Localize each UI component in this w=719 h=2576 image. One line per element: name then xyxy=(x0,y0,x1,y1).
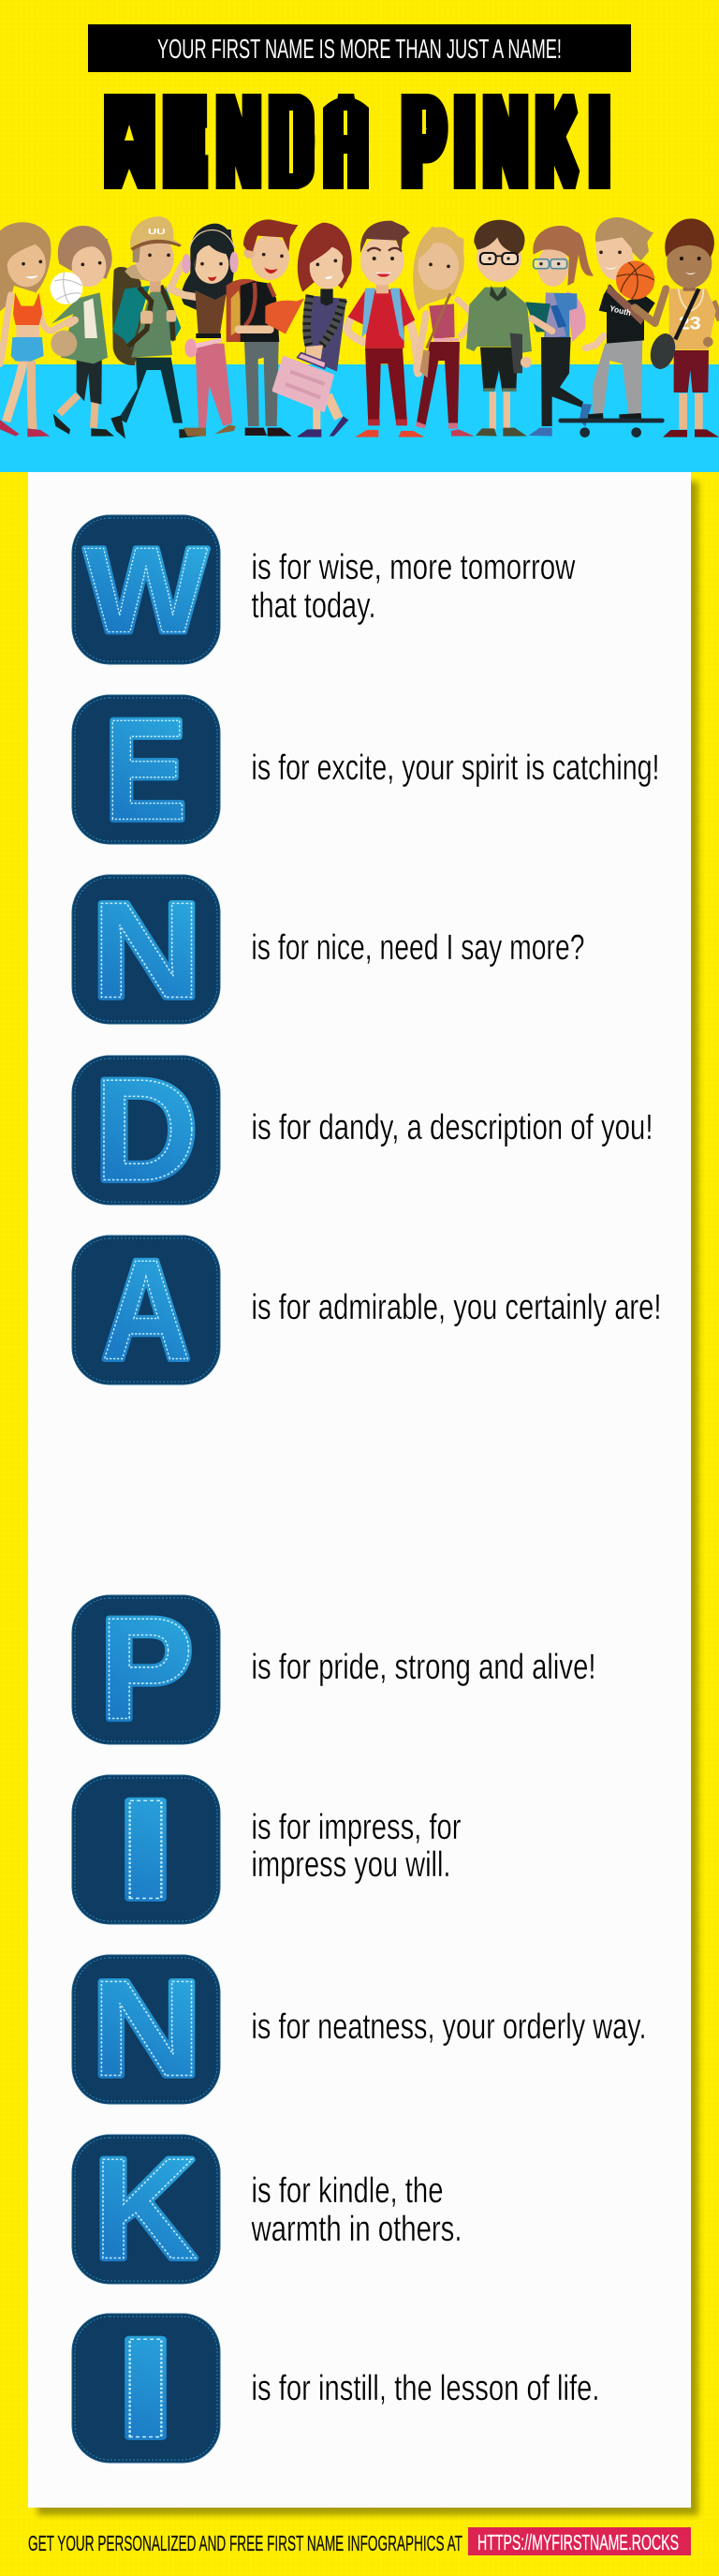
letter I second: I xyxy=(115,2309,176,2467)
letter K: K xyxy=(94,2129,197,2289)
title: name: K xyxy=(537,82,576,200)
person 9 with glasses xyxy=(466,220,532,437)
row: E xyxy=(72,690,659,851)
text W xyxy=(251,548,576,626)
letter I: I xyxy=(115,1770,176,1929)
text N: is for nice, need I say more? xyxy=(251,928,584,968)
letter P: P xyxy=(99,1588,194,1750)
letter W: W xyxy=(84,522,208,658)
title: name xyxy=(104,81,608,201)
text I xyxy=(251,1808,462,1885)
text K xyxy=(251,2171,462,2249)
person 8 blonde with shoulder bag xyxy=(413,227,475,437)
group: left four people xyxy=(0,216,239,438)
row: I xyxy=(72,1770,462,1929)
text I second: is for instill, the lesson of life. xyxy=(251,2369,599,2408)
group: right four people xyxy=(466,217,719,437)
letter K: K xyxy=(94,2129,197,2289)
letter E: E xyxy=(104,690,187,851)
row: I second xyxy=(72,2309,599,2467)
panel shadow xyxy=(37,481,698,2515)
text K: warmth in others. xyxy=(251,2210,462,2249)
title: name: P xyxy=(404,83,444,201)
person 1 xyxy=(0,222,73,437)
panel: name letters xyxy=(28,472,691,2508)
person 3 with backpack xyxy=(110,216,199,438)
letter E: E xyxy=(104,690,187,851)
volleyball xyxy=(51,272,82,304)
text W: that today. xyxy=(251,586,376,626)
letter N second: N xyxy=(91,1952,202,2105)
person 11 on skateboard with basketball: Youth xyxy=(609,303,632,318)
letter A: A xyxy=(101,1231,191,1390)
title: name: I xyxy=(456,81,473,200)
title: name: N xyxy=(485,83,526,201)
text K: is for kindle, the xyxy=(251,2171,444,2211)
letter N: N xyxy=(91,874,202,1027)
row: D xyxy=(72,1049,653,1211)
person 11 on skateboard with basketball xyxy=(561,217,662,437)
person 4 with headphones xyxy=(170,224,239,437)
row: P xyxy=(72,1588,595,1750)
letter D: D xyxy=(95,1049,198,1211)
row: W xyxy=(72,515,576,664)
title: name: W xyxy=(109,82,151,201)
person 2 with volleyball xyxy=(51,226,114,437)
person 3 with backpack: UU xyxy=(148,228,166,236)
letter N: N xyxy=(91,874,202,1027)
letter P: P xyxy=(99,1588,194,1750)
row: A xyxy=(72,1231,661,1390)
row: K xyxy=(72,2128,462,2289)
letter N second: N xyxy=(91,1952,202,2105)
group: middle four people xyxy=(227,219,475,437)
text P: is for pride, strong and alive! xyxy=(251,1648,595,1687)
person 6 with pink bag xyxy=(273,223,352,437)
title: name: I xyxy=(591,81,608,200)
letter I: I xyxy=(115,1770,176,1929)
title: name: A xyxy=(329,81,364,200)
title: name: D xyxy=(271,83,311,201)
text I: impress you will. xyxy=(251,1845,451,1885)
row: N second xyxy=(72,1952,646,2105)
text W: is for wise, more tomorrow xyxy=(251,548,576,587)
illustration: crowd of students xyxy=(0,216,719,438)
title: name: N xyxy=(218,83,259,201)
person 12 with shoulder bag xyxy=(635,218,719,437)
header bar xyxy=(88,24,631,72)
letter D: D xyxy=(95,1049,198,1211)
person 12 with shoulder bag: 23 xyxy=(679,315,701,334)
person 5 with book xyxy=(227,219,304,437)
row: N xyxy=(72,874,584,1027)
basketball xyxy=(616,260,654,300)
person 10 with tablet and ponytail xyxy=(525,226,594,437)
blue floor band xyxy=(0,364,719,472)
letter I second: I xyxy=(115,2309,176,2467)
title: name: E xyxy=(165,83,204,201)
letter W: W xyxy=(84,522,208,658)
person 7 in red shirt xyxy=(347,221,424,437)
text I: is for impress, for xyxy=(251,1808,462,1847)
letter A: A xyxy=(101,1231,191,1390)
